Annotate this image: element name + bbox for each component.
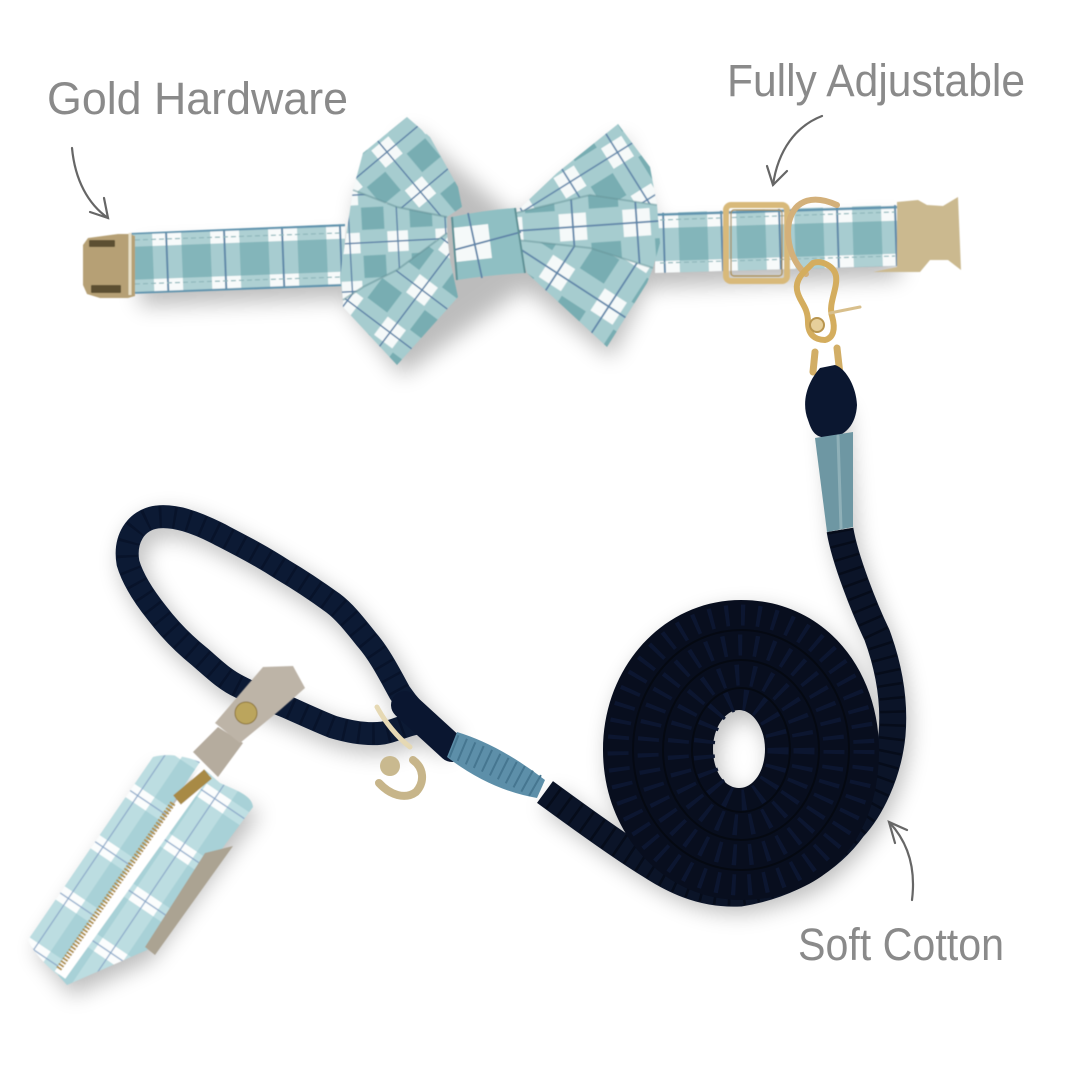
bow right wing [515,124,660,347]
coiled navy rope [603,600,879,900]
swivel clip and D ring [788,200,860,392]
soft drop shadows [35,130,900,996]
label: Fully Adjustable: Fully Adjustable [727,55,1025,106]
pouch body [28,755,253,985]
arrow: to adjustable slider [767,116,822,185]
collar strap left [130,224,345,294]
rope leash top section [545,365,893,893]
brass rivet [235,702,257,724]
arrow: to gold hardware [72,148,108,218]
gold slider [726,205,787,281]
bow centre knot [452,208,525,280]
bow left wing [340,117,462,365]
gold side-release buckle left [83,233,135,298]
coil rope strands [618,615,864,885]
arrow: to soft cotton rope [889,822,913,900]
blue thread wrap lower [447,732,545,798]
collar with plaid strap [83,197,961,298]
plaid bow tie [340,117,660,365]
pouch strap [193,666,305,777]
blue thread wrap upper [815,432,853,532]
rope run down to coil [545,530,893,893]
label: Soft Cotton: Soft Cotton [798,919,1004,970]
label: Gold Hardware: Gold Hardware [47,73,348,124]
collar strap right [655,205,898,273]
pouch tag [145,846,233,955]
hand loop [127,517,447,745]
gold hook charm [377,707,422,796]
rope end knot [805,365,857,438]
rope junction knot [405,705,452,748]
pouch zipper [58,772,208,975]
gold buckle right [873,197,961,272]
poop bag pouch [28,666,305,985]
